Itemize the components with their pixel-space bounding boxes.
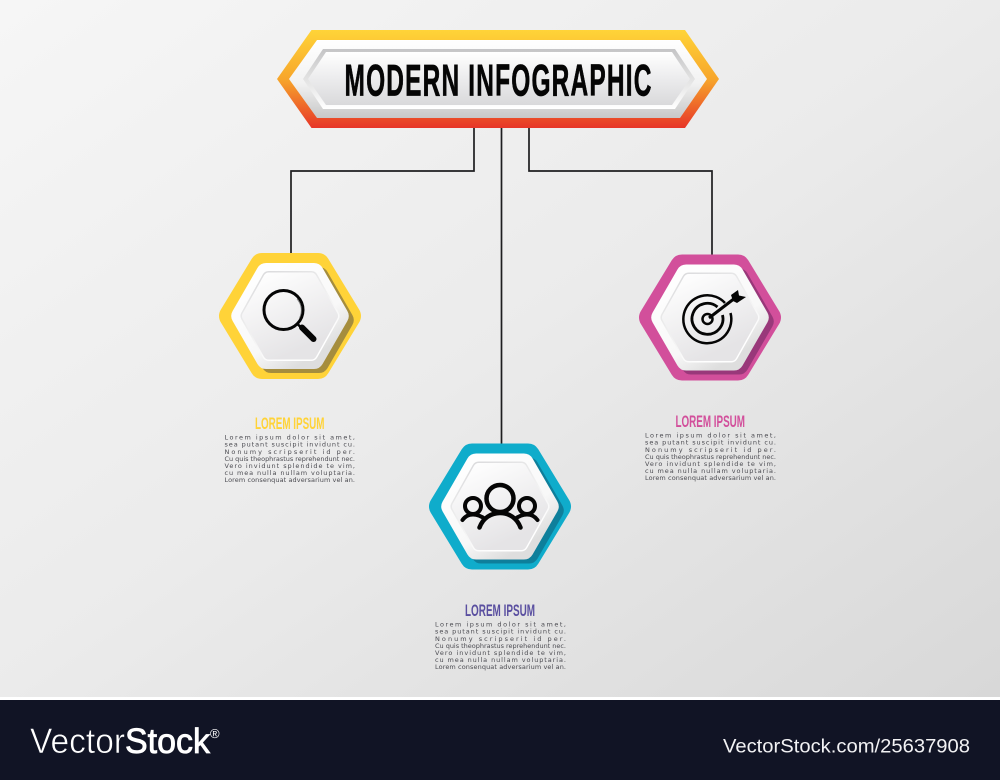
title text: MODERN INFOGRAPHIC [344,55,651,105]
text block 1: Lorem consenquat adversarium vel an. [224,476,355,484]
image id: VectorStock.com/25637908 [723,736,970,758]
text block 3: Cu quis theophrastus reprehendunt nec. [645,453,776,461]
pink hexagon [651,266,769,368]
logo [30,722,220,761]
text block 1: Vero invidunt splendide te vim, [224,462,355,470]
step 2: team [435,456,566,671]
text block 3: sea putant suscipit invidunt cu. [645,439,776,447]
step 1: search [224,265,355,484]
logo: ® [210,726,220,741]
text block 3: cu mea nulla nullam voluptaria. [645,467,776,475]
heading: lorem ipsum blue: LOREM IPSUM [465,601,535,620]
text block 2: cu mea nulla nullam voluptaria. [435,656,566,664]
title banner [277,30,719,128]
text block 3 [645,432,776,482]
footer band [0,700,1000,780]
yellow hexagon [231,265,349,367]
heading: lorem ipsum yellow: LOREM IPSUM [255,414,324,433]
icon: magnifying glass [264,290,314,339]
text block 2: Lorem ipsum dolor sit amet, [435,620,566,628]
text block 2: Lorem consenquat adversarium vel an. [435,663,566,671]
logo: Vector [30,722,125,761]
text block 1: sea putant suscipit invidunt cu. [224,441,355,449]
text block 2: Vero invidunt splendide te vim, [435,649,566,657]
step 3: target [645,266,776,482]
text block 1: Nonumy scripserit id per. [224,448,355,456]
text block 3: Lorem consenquat adversarium vel an. [645,474,776,482]
blue hexagon [441,456,559,558]
text block 2: Nonumy scripserit id per. [435,635,566,643]
logo: Stock [125,722,210,761]
text block 1 [224,434,355,484]
connector lines [291,128,712,444]
text block 2: sea putant suscipit invidunt cu. [435,628,566,636]
text block 3: Vero invidunt splendide te vim, [645,460,776,468]
text block 1: Cu quis theophrastus reprehendunt nec. [224,455,355,463]
text block 2 [435,620,566,671]
text block 2: Cu quis theophrastus reprehendunt nec. [435,642,566,650]
icon: target with arrow [683,290,746,343]
text block 1: Lorem ipsum dolor sit amet, [224,434,355,442]
text block 3: Nonumy scripserit id per. [645,446,776,454]
heading: lorem ipsum pink: LOREM IPSUM [676,412,745,431]
icon: people [462,485,538,528]
text block 3: Lorem ipsum dolor sit amet, [645,432,776,440]
text block 1: cu mea nulla nullam voluptaria. [224,469,355,477]
